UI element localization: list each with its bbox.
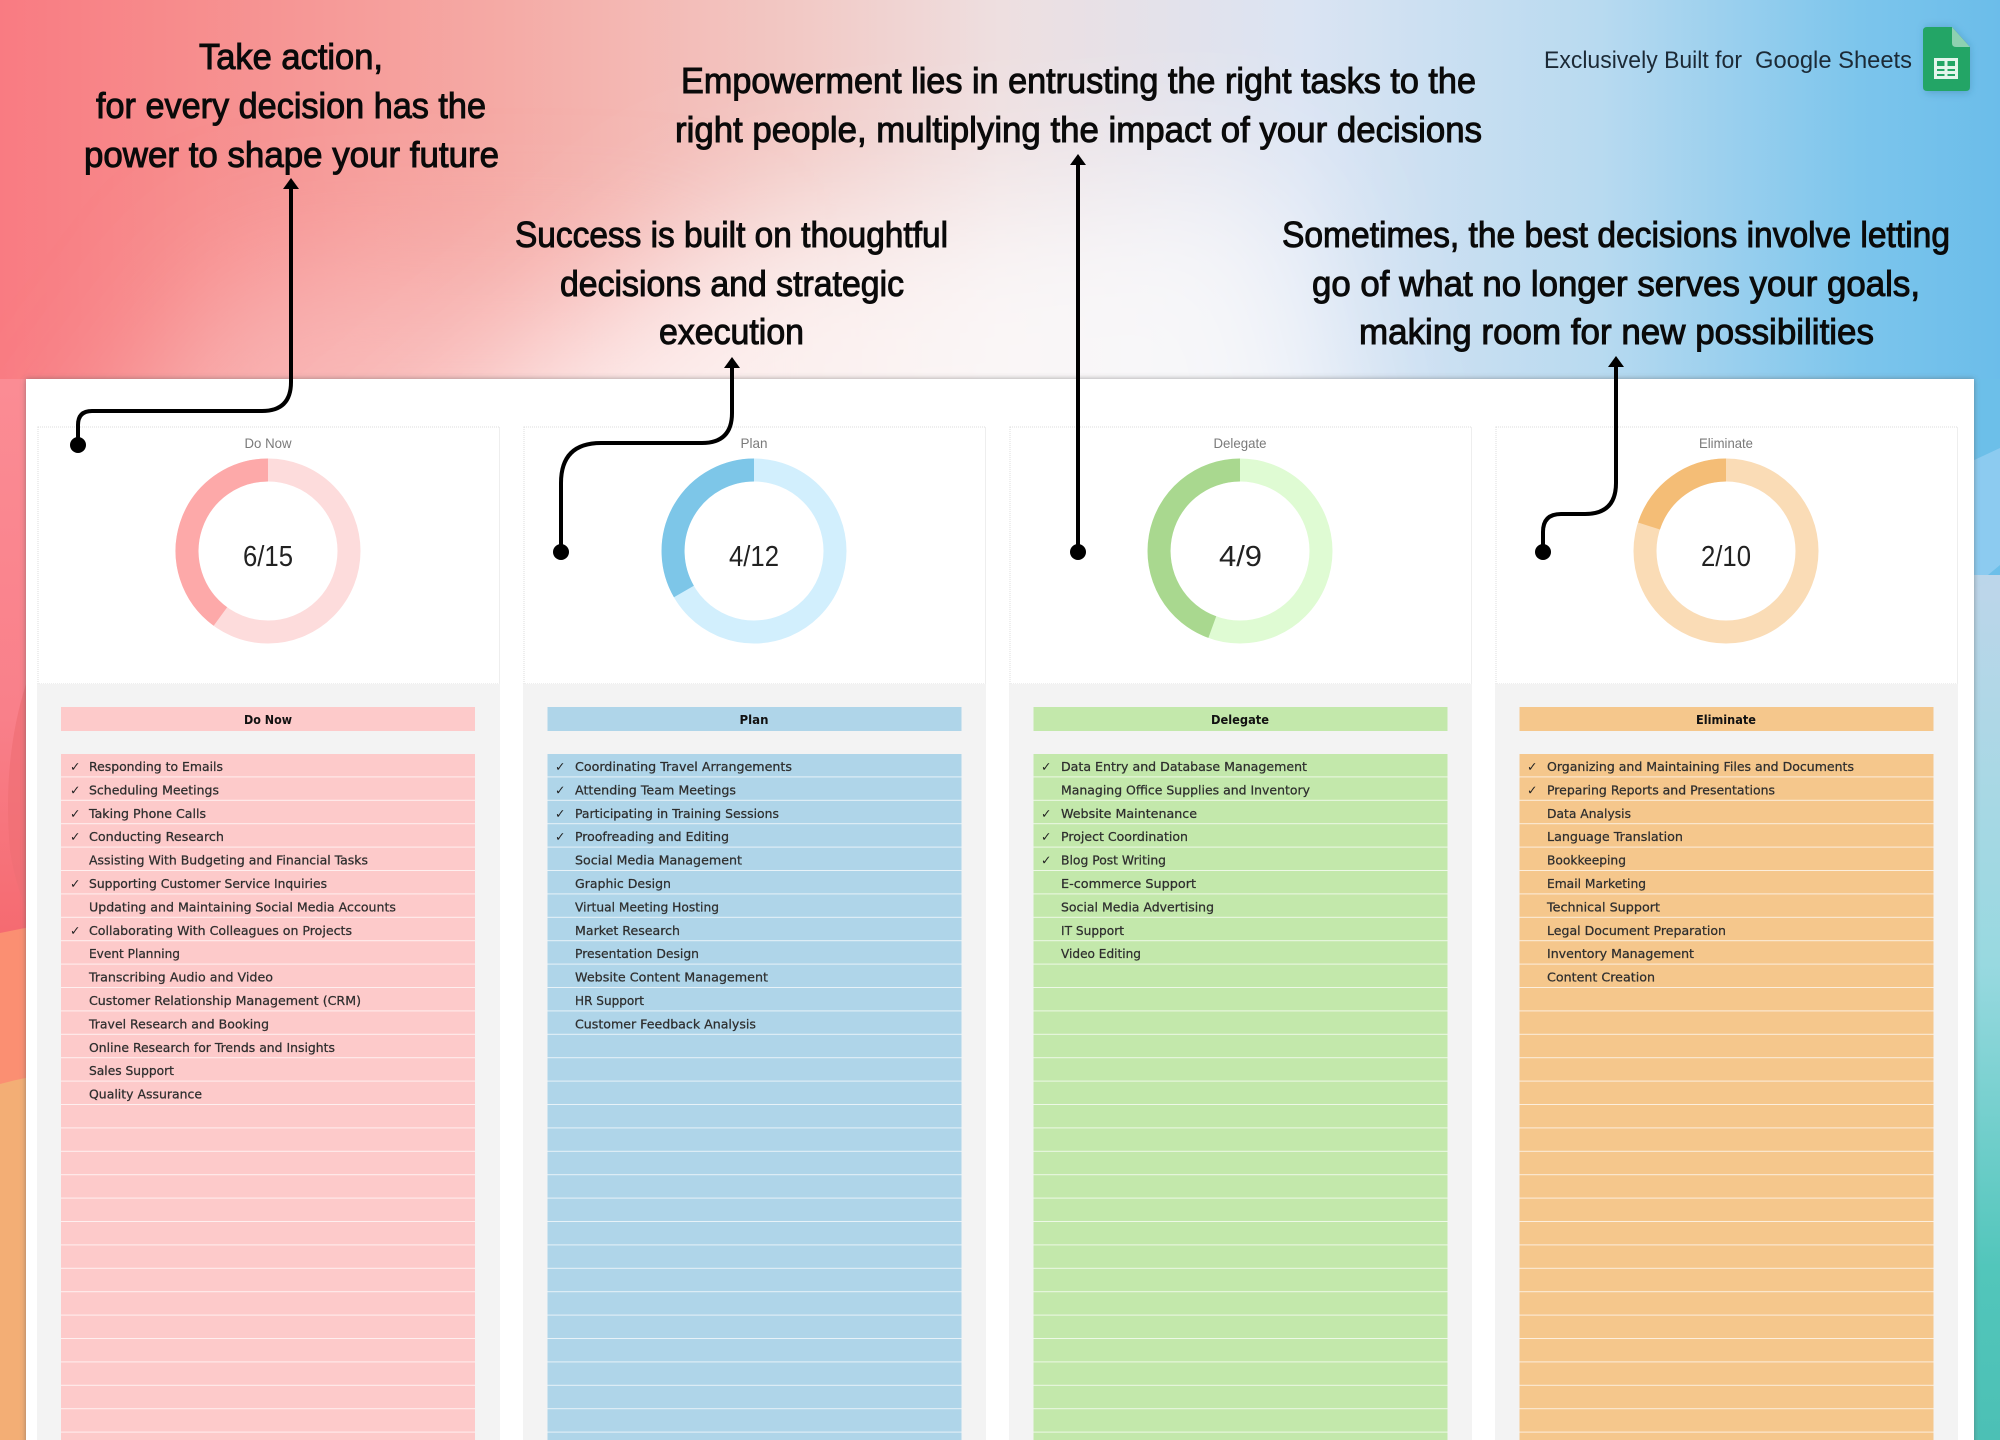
- column: Plan: [523, 427, 986, 1440]
- column: Do Now: [37, 427, 500, 1440]
- arrow: Plan to success: [553, 357, 740, 560]
- task list: Do Now: Quality Assurance: [89, 1087, 202, 1102]
- heading: sometimes: Sometimes, the best decisions involve letting: [1282, 214, 1950, 255]
- chart card: Plan: 4/12: [729, 541, 779, 573]
- task list: Delegate: Delegate: [1211, 712, 1269, 727]
- column: Eliminate: [1495, 427, 1958, 1440]
- task list: Eliminate: Legal Document Preparation: [1547, 923, 1726, 938]
- task list: Plan: Customer Feedback Analysis: [575, 1016, 756, 1031]
- task list: Delegate: ✓: [1041, 759, 1051, 774]
- task list: Do Now: Do Now: [244, 712, 292, 727]
- task list: Do Now: Taking Phone Calls: [88, 806, 206, 821]
- heading: empowerment: right people, multiplying the impact of your decisions: [675, 109, 1482, 150]
- dashboard panel: [26, 379, 1974, 1440]
- task list: Do Now: Sales Support: [89, 1063, 174, 1078]
- task list: Plan: Coordinating Travel Arrangements: [575, 759, 792, 774]
- chart card: Delegate: 4/9: [1219, 541, 1262, 573]
- task list: Plan: ✓: [555, 806, 565, 821]
- task list: Plan: Participating in Training Sessions: [575, 806, 779, 821]
- badge: built for Google Sheets: Google Sheets: [1755, 47, 1912, 74]
- task list: Plan: Graphic Design: [575, 876, 671, 891]
- task list: Delegate: ✓: [1041, 829, 1051, 844]
- task list: Do Now: Travel Research and Booking: [88, 1016, 269, 1031]
- task list: Do Now: Transcribing Audio and Video: [88, 970, 273, 985]
- badge: built for Google Sheets: [1544, 47, 1912, 74]
- chart card: Do Now: [38, 427, 500, 684]
- arrow: Do Now to take action: [70, 178, 299, 453]
- heading: success: execution: [659, 311, 804, 352]
- task list: Plan: Virtual Meeting Hosting: [575, 899, 719, 914]
- task list: Plan: ✓: [555, 829, 565, 844]
- task list: Eliminate: Language Translation: [1547, 829, 1683, 844]
- heading: empowerment: [675, 60, 1482, 150]
- task list: Do Now: ✓: [70, 782, 80, 797]
- task list: Plan: Market Research: [575, 923, 680, 938]
- task list: Eliminate: Organizing and Maintaining Files and Documents: [1547, 759, 1854, 774]
- task list: Do Now: Supporting Customer Service Inquiries: [89, 876, 327, 891]
- heading: success: [515, 214, 948, 352]
- chart card: Delegate: Delegate: [1214, 435, 1267, 451]
- badge: built for Google Sheets: Exclusively Built for: [1544, 47, 1742, 74]
- task list: Do Now: Responding to Emails: [89, 759, 223, 774]
- task list: Eliminate: Data Analysis: [1547, 806, 1631, 821]
- chart card: Plan: Plan: [740, 435, 768, 451]
- heading: sometimes: [1282, 214, 1950, 352]
- task list: Do Now: Assisting With Budgeting and Financial Tasks: [89, 853, 368, 868]
- task list: Eliminate: Preparing Reports and Presentations: [1547, 782, 1775, 797]
- task list: Plan: Social Media Management: [575, 853, 742, 868]
- chart card: Eliminate: Eliminate: [1699, 435, 1753, 451]
- task list: Do Now: ✓: [70, 876, 80, 891]
- task list: Plan: Website Content Management: [575, 970, 768, 985]
- task list: Eliminate: Technical Support: [1546, 899, 1660, 914]
- task list: Plan: Plan: [740, 712, 768, 727]
- task list: Plan: HR Support: [575, 993, 644, 1008]
- task list: Do Now: Updating and Maintaining Social Media Accounts: [89, 899, 396, 914]
- arrow: Eliminate to sometimes: [1535, 356, 1624, 560]
- task list: Eliminate: [1495, 684, 1958, 1440]
- task list: Plan: [523, 684, 986, 1440]
- heading: take action: Take action,: [199, 36, 383, 77]
- chart card: Eliminate: [1496, 427, 1958, 684]
- task list: Delegate: [1009, 684, 1472, 1440]
- task list: Plan: ✓: [555, 759, 565, 774]
- heading: take action: [84, 36, 499, 175]
- heading: empowerment: Empowerment lies in entrusting the right tasks to the: [681, 60, 1476, 101]
- arrow: Delegate to empowerment: [1070, 154, 1086, 560]
- heading: take action: power to shape your future: [84, 134, 499, 175]
- chart card: Eliminate: 2/10: [1701, 541, 1751, 573]
- task list: Delegate: E-commerce Support: [1061, 876, 1196, 891]
- icon: Google Sheets: [1923, 27, 1970, 93]
- column: Delegate: [1009, 427, 1472, 1440]
- task list: Delegate: Managing Office Supplies and Inventory: [1061, 782, 1311, 797]
- chart card: Do Now: 6/15: [243, 541, 293, 573]
- task list: Delegate: ✓: [1041, 806, 1051, 821]
- task list: Do Now: Online Research for Trends and Insights: [89, 1040, 335, 1055]
- task list: Plan: Presentation Design: [575, 946, 699, 961]
- task list: Eliminate: ✓: [1527, 782, 1537, 797]
- task list: Eliminate: ✓: [1527, 759, 1537, 774]
- task list: Delegate: Blog Post Writing: [1061, 853, 1166, 868]
- task list: Delegate: Social Media Advertising: [1061, 899, 1214, 914]
- task list: Eliminate: Content Creation: [1547, 970, 1655, 985]
- task list: Eliminate: Eliminate: [1696, 712, 1756, 727]
- task list: Do Now: Collaborating With Colleagues on Projects: [89, 923, 352, 938]
- task list: Delegate: Data Entry and Database Management: [1061, 759, 1307, 774]
- task list: Do Now: Event Planning: [89, 946, 180, 961]
- chart card: Do Now: Do Now: [244, 435, 292, 451]
- task list: Plan: Proofreading and Editing: [575, 829, 729, 844]
- heading: success: decisions and strategic: [560, 263, 904, 304]
- task list: Do Now: Scheduling Meetings: [89, 782, 219, 797]
- heading: sometimes: making room for new possibilities: [1359, 311, 1874, 352]
- task list: Delegate: IT Support: [1061, 923, 1124, 938]
- task list: Delegate: Project Coordination: [1061, 829, 1188, 844]
- heading: sometimes: go of what no longer serves your goals,: [1312, 263, 1920, 304]
- task list: Eliminate: Inventory Management: [1547, 946, 1694, 961]
- task list: Do Now: Customer Relationship Management (CRM): [89, 993, 361, 1008]
- task list: Do Now: Conducting Research: [89, 829, 224, 844]
- task list: Plan: ✓: [555, 782, 565, 797]
- task list: Eliminate: Bookkeeping: [1547, 853, 1626, 868]
- task list: Do Now: ✓: [70, 759, 80, 774]
- task list: Do Now: ✓: [70, 923, 80, 938]
- chart card: Plan: [524, 427, 986, 684]
- task list: Delegate: ✓: [1041, 853, 1051, 868]
- task list: Eliminate: Email Marketing: [1547, 876, 1646, 891]
- task list: Do Now: ✓: [70, 806, 80, 821]
- task list: Plan: Attending Team Meetings: [575, 782, 736, 797]
- task list: Do Now: [37, 684, 500, 1440]
- heading: take action: for every decision has the: [96, 85, 486, 126]
- chart card: Delegate: [1010, 427, 1472, 684]
- task list: Do Now: ✓: [70, 829, 80, 844]
- task list: Delegate: Website Maintenance: [1061, 806, 1197, 821]
- task list: Delegate: Video Editing: [1061, 946, 1141, 961]
- heading: success: Success is built on thoughtful: [515, 214, 948, 255]
